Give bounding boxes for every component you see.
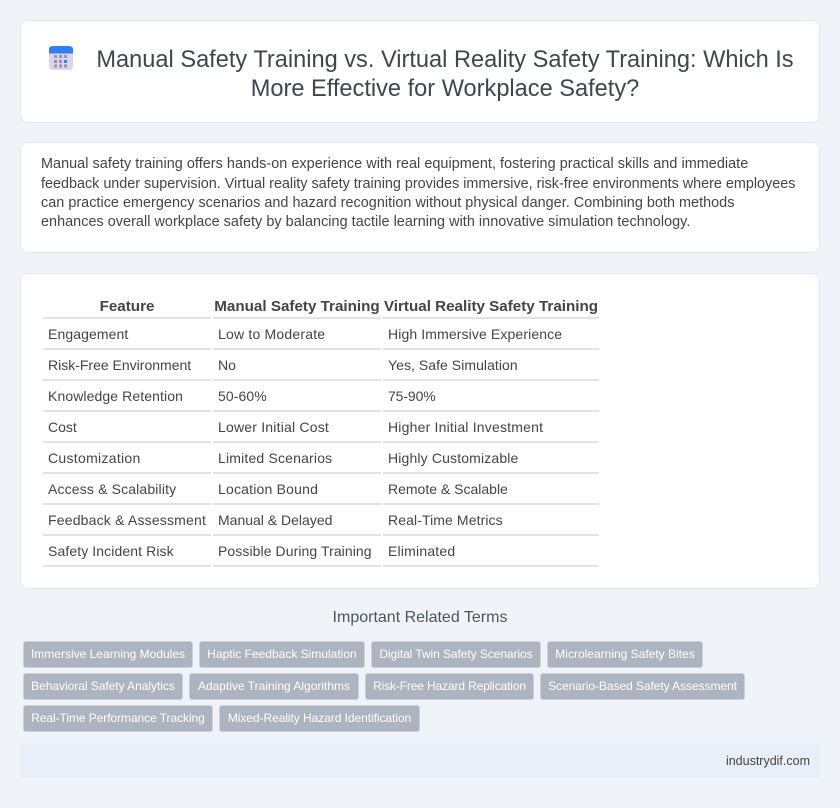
row: Feedback & Assessment: Manual & Delayed	[218, 512, 332, 528]
tag	[23, 705, 213, 732]
tag: Haptic Feedback Simulation	[207, 647, 357, 661]
title: More Effective for Workplace Safety?	[251, 76, 639, 102]
tag	[23, 673, 183, 700]
row: Safety Incident Risk: Possible During Training	[218, 543, 372, 559]
intro text: can practice emergency scenarios and hazard recognition without physical danger. Combining both methods	[41, 195, 734, 211]
intro text: enhances overall workplace safety by balancing tactile learning with innovative simulation technology.	[41, 214, 690, 230]
tag: Microlearning Safety Bites	[555, 647, 695, 661]
tag	[23, 641, 193, 668]
row: Cost: Higher Initial Investment	[388, 419, 543, 435]
row: Knowledge Retention: Knowledge Retention	[48, 388, 183, 404]
table header: Virtual Reality Safety Training: Virtual Reality Safety Training	[384, 298, 598, 315]
footer bar	[20, 744, 820, 778]
footer credit: industrydif.com	[726, 754, 810, 768]
tag	[199, 641, 365, 668]
header panel	[20, 20, 820, 123]
comparison table	[43, 297, 600, 568]
row: Knowledge Retention	[48, 388, 436, 404]
row: Cost: Cost	[48, 419, 77, 435]
row: Risk-Free Environment: No	[218, 357, 236, 373]
intro text: Manual safety training offers hands-on experience with real equipment, fostering practical skills and immediate	[41, 156, 748, 172]
intro text	[41, 156, 795, 230]
intro text: feedback under supervision. Virtual reality safety training provides immersive, risk-free environments where employees	[41, 176, 795, 192]
tag	[547, 641, 703, 668]
row: Customization: Customization	[48, 450, 141, 466]
row: Customization: Limited Scenarios	[218, 450, 332, 466]
row: Risk-Free Environment	[48, 357, 518, 373]
tag: Digital Twin Safety Scenarios	[379, 647, 533, 661]
tag	[371, 641, 541, 668]
tag	[540, 673, 745, 700]
row: Customization: Highly Customizable	[388, 450, 518, 466]
row: Feedback & Assessment: Feedback & Assessment	[48, 512, 206, 528]
row: Knowledge Retention: 50-60%	[218, 388, 267, 404]
title	[96, 47, 794, 102]
row: Engagement: High Immersive Experience	[388, 326, 562, 342]
row: Engagement: Engagement	[48, 326, 128, 342]
tag	[365, 673, 534, 700]
row: Access & Scalability: Access & Scalability	[48, 481, 176, 497]
row: Cost	[48, 419, 543, 435]
intro panel	[20, 142, 820, 253]
table panel	[20, 273, 820, 589]
row: Customization	[48, 450, 518, 466]
tag: Adaptive Training Algorithms	[198, 679, 350, 693]
tag: Real-Time Performance Tracking	[31, 711, 205, 725]
tag	[189, 673, 359, 700]
row: Feedback & Assessment	[48, 512, 503, 528]
tag: Immersive Learning Modules	[31, 647, 185, 661]
related terms heading: Important Related Terms	[333, 609, 507, 626]
row: Cost: Lower Initial Cost	[218, 419, 329, 435]
icon: calendar	[49, 46, 73, 70]
row: Safety Incident Risk	[48, 543, 455, 559]
row: Safety Incident Risk: Safety Incident Risk	[48, 543, 174, 559]
row: Access & Scalability: Remote & Scalable	[388, 481, 508, 497]
tag: Risk-Free Hazard Replication	[373, 679, 526, 693]
title: Manual Safety Training vs. Virtual Reality Safety Training: Which Is	[96, 47, 794, 73]
row: Engagement: Low to Moderate	[218, 326, 325, 342]
row: Knowledge Retention: 75-90%	[388, 388, 436, 404]
row: Risk-Free Environment: Risk-Free Environment	[48, 357, 191, 373]
row: Safety Incident Risk: Eliminated	[388, 543, 455, 559]
row: Engagement	[48, 326, 562, 342]
row: Feedback & Assessment: Real-Time Metrics	[388, 512, 503, 528]
tag: Mixed-Reality Hazard Identification	[228, 711, 411, 725]
row: Access & Scalability	[48, 481, 508, 497]
tag: Scenario-Based Safety Assessment	[548, 679, 737, 693]
table header: Manual Safety Training: Manual Safety Training	[214, 298, 380, 315]
table header: Feature: Feature	[100, 298, 154, 315]
row: Access & Scalability: Location Bound	[218, 481, 318, 497]
tag: Behavioral Safety Analytics	[31, 679, 175, 693]
tag	[219, 705, 420, 732]
row: Risk-Free Environment: Yes, Safe Simulation	[388, 357, 518, 373]
